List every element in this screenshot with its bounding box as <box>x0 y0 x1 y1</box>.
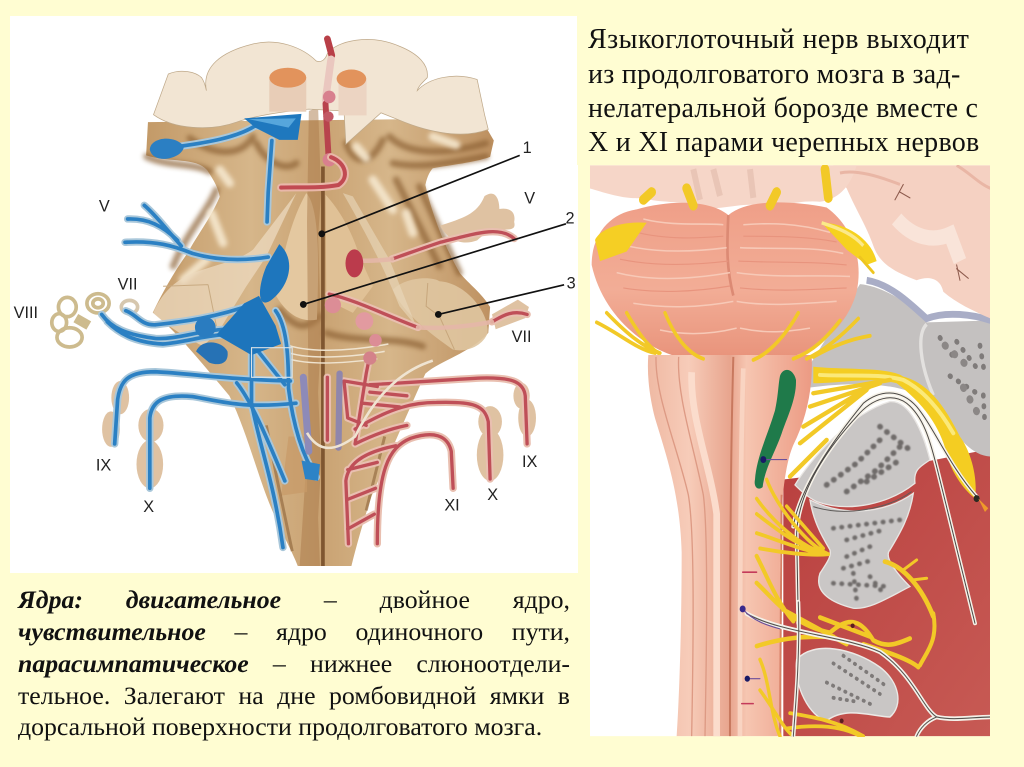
nerve labels: V <box>99 198 110 216</box>
medulla oblongata <box>648 355 812 736</box>
nerve labels: X <box>143 498 154 516</box>
text block: nuclei description <box>17 585 570 741</box>
nerve labels: 2 <box>565 209 575 227</box>
yellow ganglion band <box>790 367 976 617</box>
vestibulocochlear labyrinth <box>52 294 138 347</box>
translucent fourth ventricle outline <box>307 361 433 448</box>
green nucleus ambiguus <box>755 370 796 489</box>
spongy bone texture <box>827 427 910 600</box>
lower vertebra <box>796 648 898 721</box>
cranial nerve ganglia, left and right <box>102 194 536 488</box>
text block: nuclei description: Ядра: двигательное – двойное ядро, <box>18 585 570 614</box>
nerve labels: VIII <box>14 304 38 322</box>
cerebellum <box>592 202 859 361</box>
nerve labels: X <box>487 486 498 504</box>
panel: brainstem nuclei diagram <box>10 16 578 573</box>
nerve labels: VII <box>512 328 532 346</box>
brainstem body <box>146 107 494 566</box>
nerve labels: 1 <box>523 139 532 157</box>
nerve labels: IX <box>96 457 111 475</box>
occipital condyle <box>795 402 930 507</box>
text block: nerve exit description: X и XI парами черепных нервов <box>588 127 980 158</box>
axis vertebra <box>810 493 913 608</box>
translucent cerebral peduncles <box>153 68 488 363</box>
upper vertebrae and nerve trunk <box>790 367 977 623</box>
leader lines 1 2 3 <box>301 155 566 317</box>
nerve labels: 3 <box>567 275 576 293</box>
nerve labels: IX <box>522 453 538 471</box>
nerve labels: VII <box>118 275 138 293</box>
cerebral cortex folds <box>589 165 991 319</box>
text block: nuclei description: чувствительное – ядро одиночного пути, <box>18 617 570 646</box>
lower nerve course lines <box>747 602 991 736</box>
grey skull bone <box>810 280 991 456</box>
cut cerebral section <box>154 39 488 144</box>
nerve labels: V <box>524 189 535 207</box>
shading folds <box>146 136 486 346</box>
motor nerves in red <box>281 39 527 544</box>
vertebra joint line <box>813 492 912 511</box>
text block: nerve exit description: из продолговатого мозга в зад- <box>588 59 961 90</box>
accessory and glossopharyngeal yellow nerve roots <box>597 169 935 736</box>
nerve labels <box>14 139 576 516</box>
muscle <box>783 449 991 736</box>
text block: nuclei description: парасимпатическое – нижнее слюноотдели- <box>18 649 570 678</box>
nerve labels: XI <box>444 496 460 514</box>
text block: nerve exit description: Языкоглоточный нерв выходит <box>588 24 969 55</box>
text block: nerve exit description: нелатеральной борозде вместе с <box>588 93 978 124</box>
lower vertebra spongy texture <box>827 656 887 705</box>
sensory nerves in blue <box>102 114 320 547</box>
yellow nerve stumps on cerebellum <box>595 222 877 273</box>
text block: nuclei description: дорсальной поверхности продолговатого мозга. <box>18 712 542 741</box>
nuclei dots <box>740 456 988 723</box>
panel: lateral view of glossopharyngeal nerve <box>590 165 990 737</box>
text block: nuclei description: тельное. Залегают на дне ромбовидной ямки в <box>18 681 570 710</box>
text block: nerve exit description <box>577 16 1000 165</box>
double nerve lines <box>793 393 977 623</box>
